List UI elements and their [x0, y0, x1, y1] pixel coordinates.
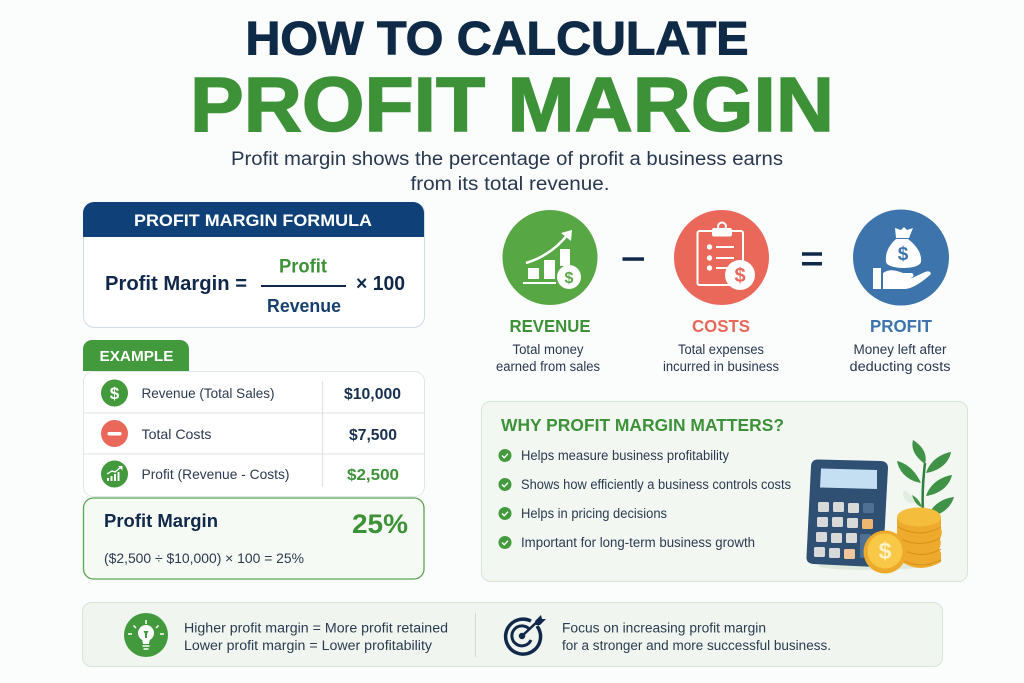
icon: profit circle: $ [898, 244, 909, 265]
revenue description [496, 342, 600, 374]
revenue description: Total money [512, 342, 584, 357]
revenue heading: REVENUE [510, 316, 590, 336]
icon: revenue dollar: $ [110, 384, 120, 403]
formula numerator: Profit [279, 256, 328, 278]
icon: revenue circle [502, 210, 598, 305]
panel: example table [83, 340, 424, 496]
icon: target [506, 615, 546, 654]
list item 4: Important for long-term business growth [521, 535, 755, 550]
result value: 25% [352, 509, 408, 539]
equation: costs [663, 210, 779, 374]
equation: revenue [496, 210, 600, 374]
operator: equals [802, 254, 822, 264]
list item 2: Shows how efficiently a business controls costs [521, 477, 791, 492]
profit description: deducting costs [850, 359, 951, 374]
illustration: plant [897, 440, 954, 515]
panel: formula [83, 202, 424, 328]
illustration: coins: $ [879, 538, 892, 564]
formula multiplier: × 100 [356, 273, 405, 295]
list item 3: Helps in pricing decisions [521, 506, 667, 521]
result label: Profit Margin [104, 510, 218, 531]
icon: profit chart [101, 460, 128, 488]
revenue description: earned from sales [496, 359, 600, 374]
fraction line [261, 285, 346, 287]
takeaway text right: Focus on increasing profit margin [562, 620, 766, 636]
icon: light bulb [124, 613, 168, 657]
icon: costs minus [101, 420, 128, 447]
takeaway text left: Lower profit margin = Lower profitability [184, 638, 432, 653]
row label: costs: Total Costs [142, 426, 212, 442]
profit description [850, 342, 951, 374]
profit heading: PROFIT [870, 316, 932, 336]
costs description: incurred in business [663, 359, 779, 374]
costs description [663, 342, 779, 374]
illustration: coins [864, 508, 942, 574]
title: profit margin: PROFIT MARGIN [190, 62, 834, 148]
formula denominator: Revenue [267, 296, 341, 316]
icon: revenue dollar [101, 380, 128, 406]
formula heading: PROFIT MARGIN FORMULA [134, 211, 372, 230]
row label: revenue: Revenue (Total Sales) [142, 385, 274, 401]
subtitle: from its total revenue. [410, 174, 610, 195]
takeaway text left [184, 620, 448, 653]
icon: costs circle [674, 210, 769, 305]
formula left side: Profit Margin = [105, 273, 247, 295]
panel: profit margin result [84, 498, 424, 579]
title: how to calculate: HOW TO CALCULATE [246, 12, 748, 64]
subtitle: Profit margin shows the percentage of profit a business earns [231, 149, 783, 170]
why heading: WHY PROFIT MARGIN MATTERS? [501, 415, 784, 435]
illustration: calculator [806, 460, 922, 570]
why list [498, 448, 791, 550]
icon: revenue circle: $ [565, 270, 574, 287]
takeaway text right: for a stronger and more successful business. [562, 638, 831, 653]
takeaway text right [562, 620, 831, 653]
costs description: Total expenses [678, 342, 764, 357]
row label: profit: Profit (Revenue - Costs) [142, 466, 290, 482]
row value: profit: $2,500 [347, 467, 399, 484]
icon: profit circle [853, 210, 949, 306]
formula header [83, 202, 424, 237]
row value: revenue: $10,000 [344, 386, 401, 403]
panel: why profit margin matters [482, 402, 968, 582]
takeaway text left: Higher profit margin = More profit retained [184, 620, 448, 636]
subtitle [231, 149, 783, 195]
example label: EXAMPLE [100, 348, 174, 365]
row value: costs: $7,500 [349, 427, 397, 444]
costs heading: COSTS [692, 316, 750, 336]
profit description: Money left after [854, 342, 947, 357]
result calculation: ($2,500 ÷ $10,000) × 100 = 25% [104, 550, 304, 566]
panel: bottom takeaways [82, 602, 942, 666]
example tab [83, 340, 189, 371]
equation: profit [850, 210, 951, 374]
list item 1: Helps measure business profitability [521, 448, 729, 463]
icon: costs circle: $ [734, 265, 746, 287]
operator: minus [622, 257, 644, 261]
